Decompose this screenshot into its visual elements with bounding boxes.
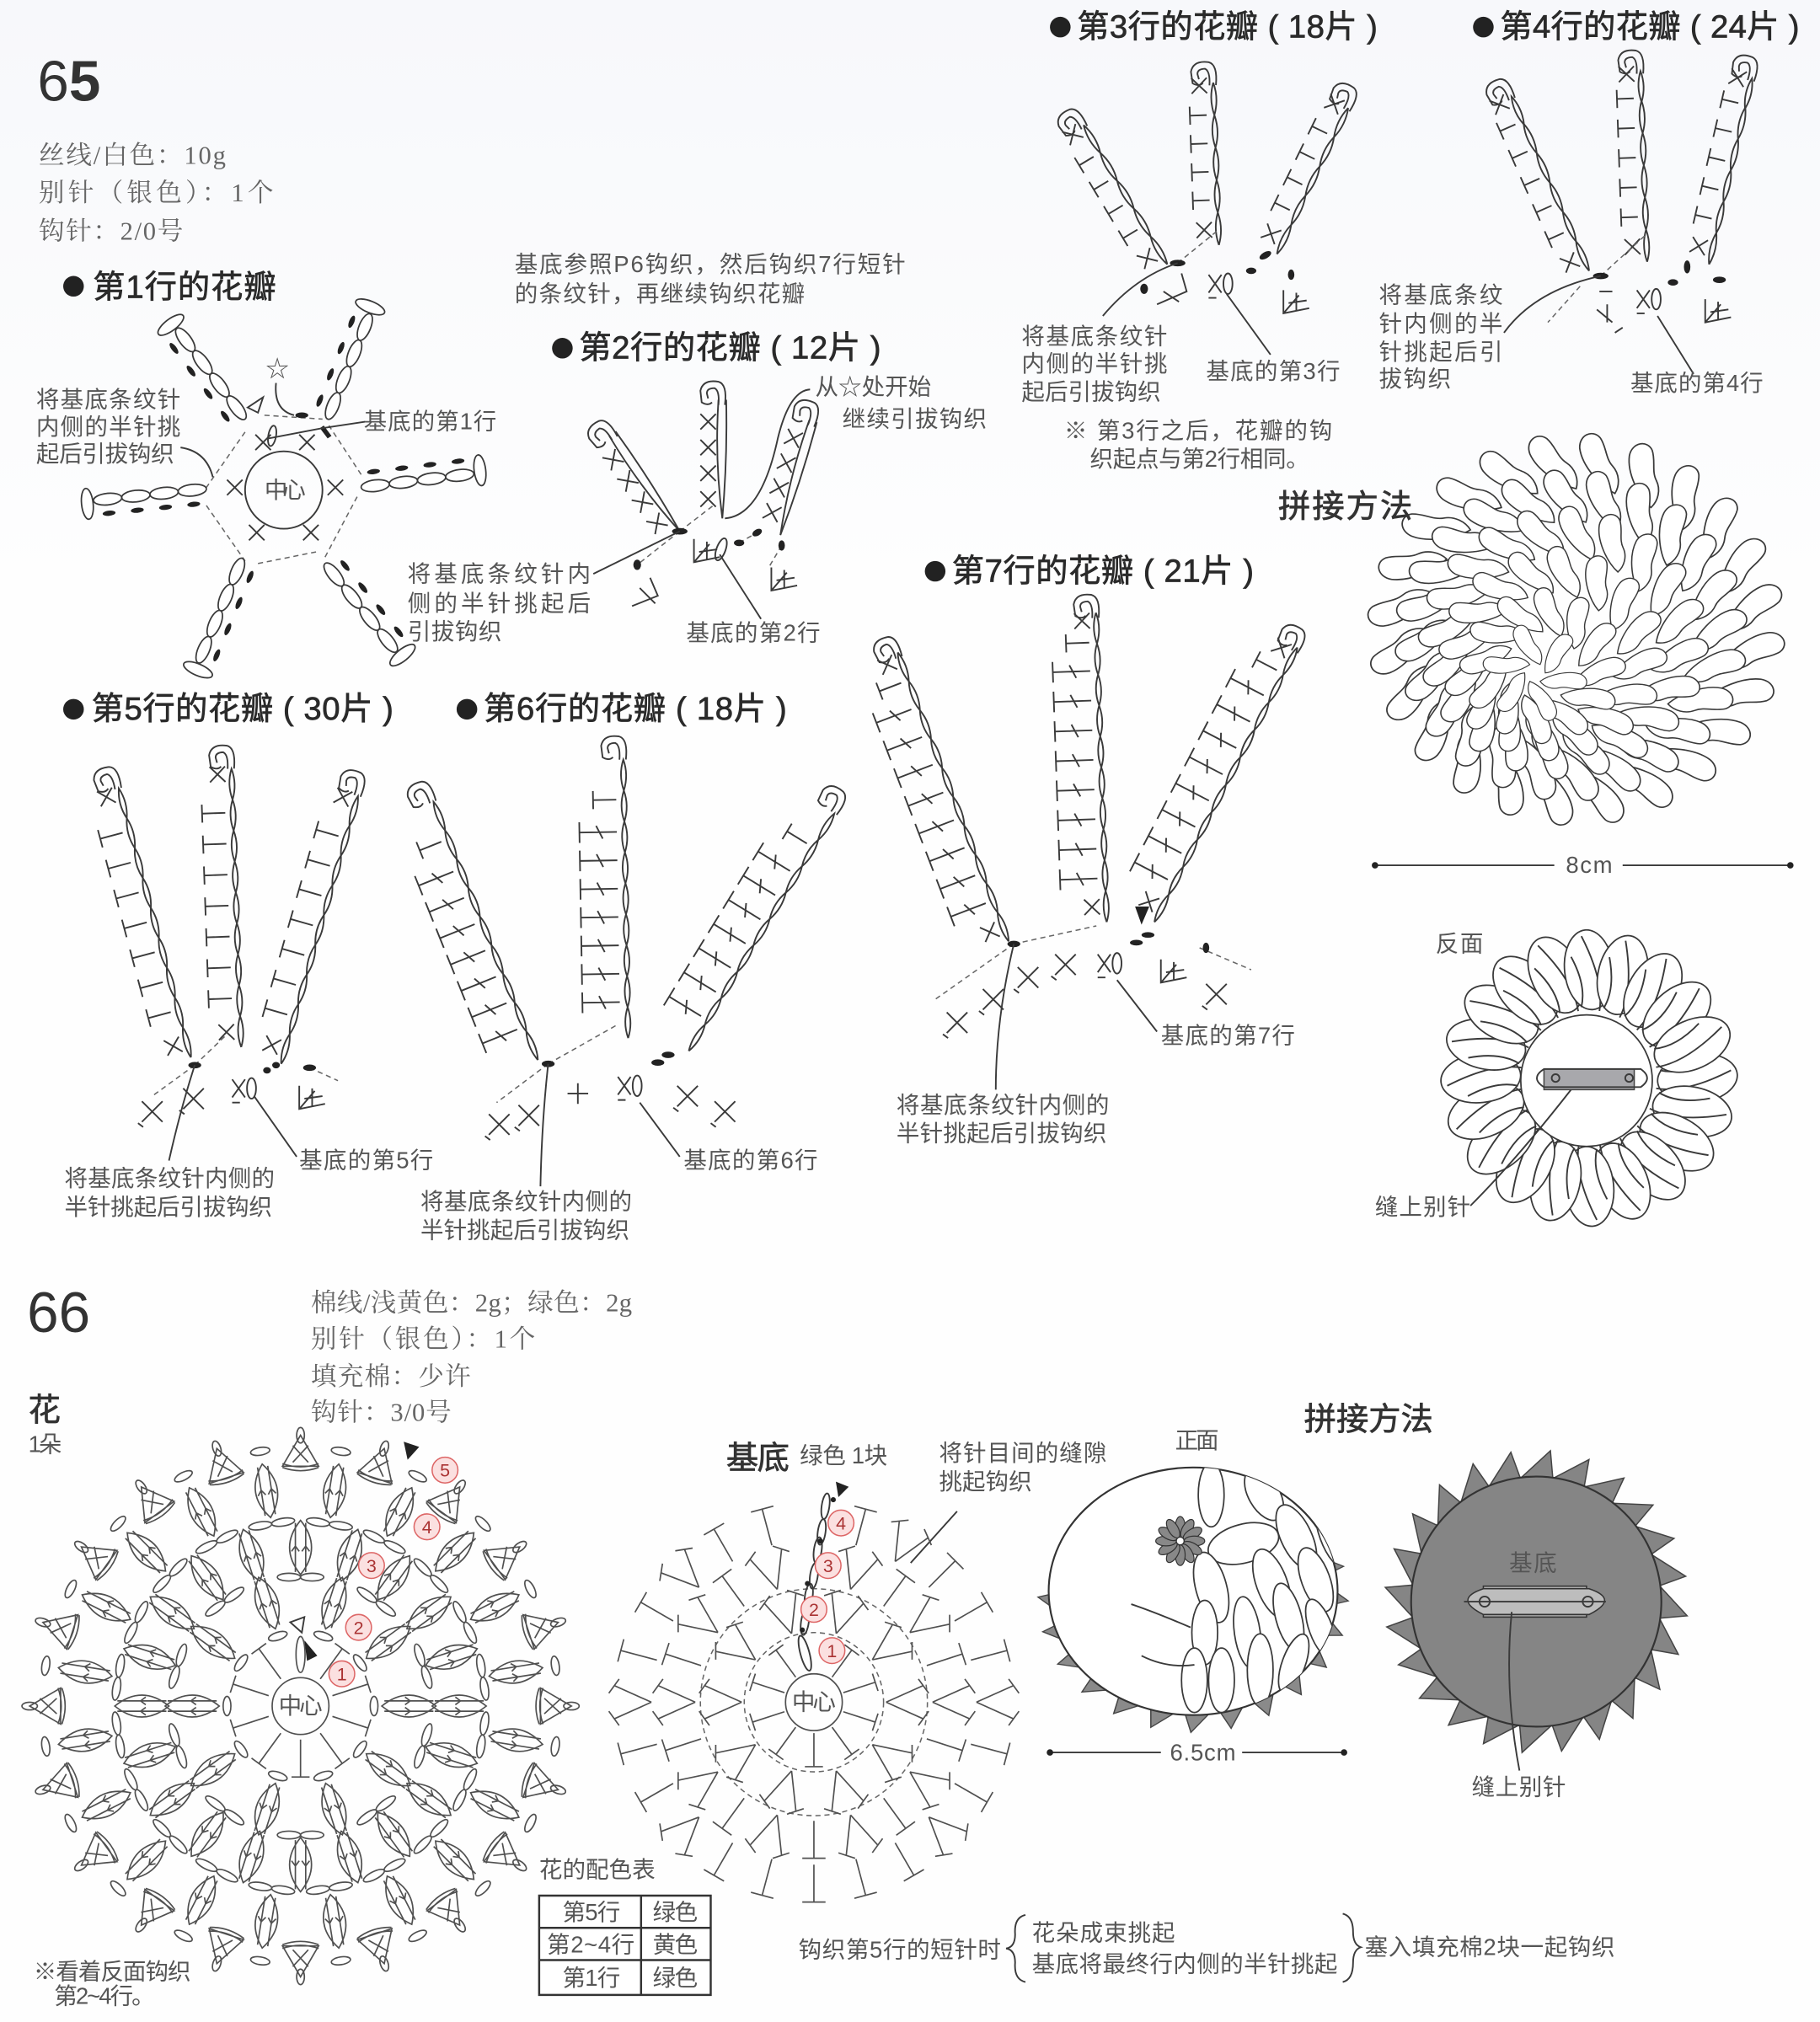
labels: row 4: 针挑起后引 [1378, 339, 1502, 365]
illustration: flower back view with brooch pin: 缝上别针 [1375, 1194, 1470, 1220]
labels: row 2: 从☆处开始 [815, 373, 931, 399]
labels: row 3: 内侧的半针挑 [1021, 350, 1167, 377]
dimension: 6.5cm: 6.5cm [1170, 1739, 1236, 1765]
materials list 65 [39, 141, 274, 246]
table: flower colour chart: 绿色 [653, 1965, 698, 1991]
row markers on base diagram [796, 1482, 854, 1672]
labels: row 2: 引拔钩织 [408, 618, 501, 645]
heading: base: 基底 [726, 1440, 790, 1476]
labels: row 3: 基底的第3行 [1206, 358, 1341, 384]
labels: row 6: 基底的第6行 [683, 1147, 818, 1174]
labels: row 1: 内侧的半针挑 [36, 414, 180, 440]
labels: row 6 [420, 1147, 818, 1243]
illustration: finished flower back [1385, 1451, 1687, 1800]
materials list 65: 别针（银色）：1个 [39, 179, 274, 207]
table: flower colour chart: 花的配色表 [539, 1857, 656, 1883]
diagram: row 6 petals [383, 736, 849, 1186]
diagram: row 1 petals [80, 296, 488, 681]
heading: base [726, 1440, 887, 1476]
heading: base: 绿色 1块 [800, 1442, 887, 1468]
materials list 66: 别针（银色）：1个 [311, 1324, 535, 1353]
heading: row 5 petals: 第5行的花瓣 ( 30片 ) [92, 691, 393, 727]
labels: row 3: 起后引拔钩织 [1021, 378, 1161, 404]
chart: base crochet diagram: 中心 [792, 1689, 836, 1715]
table: flower colour chart: 绿色 [653, 1899, 698, 1925]
labels: row 5 [65, 1147, 433, 1220]
labels: row 6: 半针挑起后引拔钩织 [420, 1217, 629, 1243]
heading: flower [29, 1393, 62, 1457]
labels: row 4 [1378, 282, 1764, 396]
labels: row 2: 将基底条纹针内 [408, 560, 591, 586]
labels: row 3: 织起点与第2行相同。 [1090, 446, 1309, 472]
label: base stitch note [911, 1440, 1106, 1563]
diagram: row 4 petals [1480, 50, 1760, 374]
dimension: 8cm: 8cm [1566, 852, 1613, 878]
note: base instructions: 的条纹针，再继续钩织花瓣 [515, 281, 805, 307]
diagram: row 1 petals: 中心 [265, 477, 306, 503]
label: base stitch note: 将针目间的缝隙 [939, 1440, 1106, 1466]
dimension: 8cm [1372, 852, 1794, 878]
note: joining instructions: 花朵成束挑起 [1032, 1920, 1175, 1946]
diagram: row 3 petals [1052, 62, 1360, 355]
heading: flower: 花 [29, 1393, 61, 1429]
chart: flower crochet diagram [22, 1427, 579, 1985]
diagram: row 7 petals [849, 594, 1309, 1089]
labels: row 1: 将基底条纹针 [36, 387, 180, 413]
labels: row 3: ※ 第3行之后，花瓣的钩 [1064, 417, 1332, 443]
row markers on base diagram: 1 [827, 1641, 837, 1661]
labels: row 3 [1021, 324, 1341, 472]
illustration: flower back view with brooch pin: 反面 [1436, 931, 1483, 957]
row markers on flower diagram: 4 [422, 1517, 432, 1538]
chart: base crochet diagram [609, 1506, 1019, 1902]
pattern number 66: 66 [27, 1281, 90, 1345]
diagram: row 1 petals: ☆ [265, 356, 289, 382]
labels: row 3: 将基底条纹针 [1021, 324, 1167, 350]
heading: row 6 petals: 第6行的花瓣 ( 18片 ) [484, 691, 787, 727]
labels: row 2: 侧的半针挑起后 [408, 591, 591, 617]
labels: row 1: 起后引拔钩织 [36, 441, 174, 467]
note: worked from reverse: 第2~4行。 [54, 1983, 155, 2009]
table: flower colour chart: 黄色 [653, 1931, 698, 1957]
note: base instructions: 基底参照P6钩织，然后钩织7行短针 [515, 251, 906, 277]
row markers on flower diagram: 1 [337, 1664, 347, 1684]
labels: row 7: 将基底条纹针内侧的 [897, 1092, 1110, 1118]
chart: flower crochet diagram: 中心 [279, 1693, 323, 1719]
illustration: flower back view with brooch pin [1375, 926, 1742, 1230]
labels: row 7: 基底的第7行 [1161, 1022, 1295, 1048]
heading: assembly 66: 拼接方法 [1304, 1401, 1433, 1437]
table: flower colour chart: 第1行 [562, 1965, 620, 1991]
row markers on flower diagram [290, 1442, 458, 1687]
panel: pattern 66 [22, 1281, 1687, 2009]
row markers on flower diagram: 5 [440, 1461, 450, 1481]
panel: pattern 65 [36, 8, 1800, 1243]
illustration: chrysanthemum front [1358, 425, 1794, 834]
row markers on flower diagram: 2 [354, 1618, 364, 1638]
labels: row 4: 针内侧的半 [1378, 310, 1502, 336]
labels: row 7 [897, 1022, 1295, 1147]
labels: row 4: 将基底条纹 [1378, 282, 1502, 308]
heading: row 4 petals: 第4行的花瓣 ( 24片 ) [1500, 8, 1800, 45]
materials list 66: 棉线/浅黄色：2g；绿色：2g [311, 1289, 632, 1318]
heading: row 7 petals: 第7行的花瓣 ( 21片 ) [952, 553, 1254, 589]
table: flower colour chart: 第5行 [562, 1899, 620, 1925]
labels: row 6: 将基底条纹针内侧的 [420, 1189, 632, 1215]
pattern number 65: 65 [37, 50, 100, 113]
materials list 66: 钩针：3/0号 [311, 1399, 452, 1427]
labels: row 2: 基底的第2行 [686, 620, 821, 646]
labels: row 1: 基底的第1行 [364, 409, 496, 435]
diagram: row 5 petals [83, 745, 367, 1161]
materials list 66 [311, 1289, 632, 1427]
illustration: finished flower front [1037, 1427, 1357, 1733]
labels: row 5: 基底的第5行 [299, 1147, 433, 1174]
note: joining instructions [799, 1913, 1615, 1982]
table: flower colour chart: 第2~4行 [547, 1931, 634, 1957]
materials list 65: 丝线/白色：10g [39, 141, 226, 169]
row markers on base diagram: 3 [823, 1556, 833, 1576]
materials list 65: 钩针：2/0号 [39, 217, 183, 246]
label: base stitch note: 挑起钩织 [939, 1468, 1032, 1495]
illustration: finished flower front: 正面 [1175, 1427, 1219, 1453]
note: joining instructions: 基底将最终行内侧的半针挑起 [1032, 1950, 1337, 1977]
labels: row 7: 半针挑起后引拔钩织 [897, 1121, 1106, 1147]
note: joining instructions: 塞入填充棉2块一起钩织 [1365, 1934, 1615, 1960]
heading: row 1 petals: 第1行的花瓣 [93, 270, 276, 306]
note: joining instructions: 钩织第5行的短针时 [799, 1936, 1001, 1962]
heading: assembly 65: 拼接方法 [1278, 489, 1412, 525]
heading: row 2 petals: 第2行的花瓣 ( 12片 ) [579, 330, 881, 366]
illustration: finished flower back: 基底 [1509, 1549, 1557, 1575]
row markers on base diagram: 2 [809, 1600, 819, 1620]
illustration: finished flower back: 缝上别针 [1472, 1774, 1566, 1800]
labels: row 4: 基底的第4行 [1630, 370, 1764, 396]
labels: row 5: 半针挑起后引拔钩织 [65, 1194, 272, 1220]
labels: row 2 [408, 373, 987, 646]
note: worked from reverse [34, 1958, 191, 2009]
note: worked from reverse: ※看着反面钩织 [34, 1958, 191, 1984]
labels: row 1 [36, 387, 496, 467]
dimension: 6.5cm [1046, 1739, 1347, 1765]
row markers on base diagram: 4 [836, 1513, 846, 1533]
table: flower colour chart [539, 1857, 710, 1995]
heading: row 3 petals: 第3行的花瓣 ( 18片 ) [1077, 8, 1378, 45]
labels: row 5: 将基底条纹针内侧的 [65, 1165, 275, 1191]
note: base instructions [515, 251, 906, 307]
labels: row 4: 拔钩织 [1378, 366, 1451, 392]
diagram: row 2 petals [584, 382, 822, 619]
row markers on flower diagram: 3 [367, 1556, 377, 1576]
materials list 66: 填充棉：少许 [311, 1362, 471, 1391]
heading: flower: 1朵 [29, 1431, 62, 1457]
labels: row 2: 继续引拔钩织 [843, 406, 987, 432]
